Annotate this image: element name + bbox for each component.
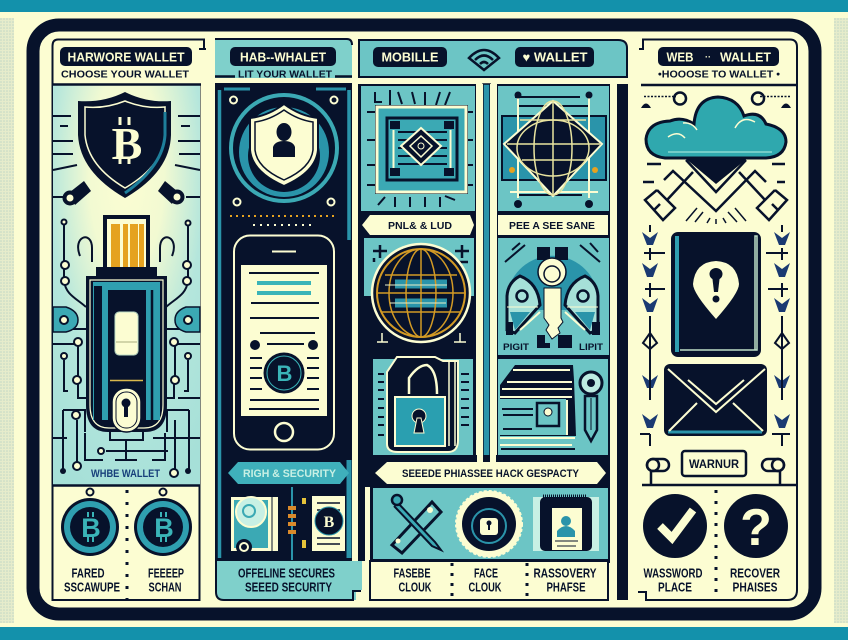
coin captions: SSCAWUPE [64, 580, 120, 594]
icon: USB hardware key [86, 215, 167, 432]
icon: cloud [646, 97, 786, 158]
subtitle [215, 68, 352, 80]
caption box: SEEED SECURITY [245, 580, 333, 594]
connector nodes [644, 92, 790, 104]
heading pill: HAB--WHALET [240, 50, 326, 64]
captions: RECOVER [730, 566, 780, 580]
circuit traces [53, 222, 200, 470]
cell: security tools [370, 487, 610, 563]
ribbon: seed phrase: SEEEDE PHIASSEE HACK GESPACTY [402, 468, 580, 480]
icon: phone [234, 236, 334, 450]
side ornaments right [766, 225, 790, 446]
icon: envelope [664, 364, 767, 436]
captions: WASSWORD [644, 566, 702, 580]
warning label [682, 451, 746, 476]
icon: lock seal [456, 491, 522, 557]
side ornaments left [640, 225, 665, 446]
icon: check circle [643, 494, 707, 558]
coin captions [64, 566, 184, 594]
icon: bitcoin coin right [134, 488, 192, 556]
icon: bitcoin coin left [61, 488, 119, 556]
caption strip: CLOUK [468, 580, 502, 594]
cell: documents and key [498, 359, 608, 455]
corner pads [53, 307, 200, 332]
icon: device with location pin [672, 233, 760, 356]
icon: connector links [62, 181, 184, 206]
pill nodes [647, 459, 784, 484]
caption strip [370, 561, 608, 600]
column backgrounds [483, 84, 490, 456]
icon: bitcoin shield: B [112, 118, 142, 169]
heading pill [230, 47, 336, 66]
cell: key and fish: LIPIT [579, 342, 603, 353]
heading pill: WEB [666, 50, 694, 64]
captions: PHAISES [732, 580, 778, 594]
subtitle: •HOOOSE TO WALLET • [658, 68, 780, 80]
captions [644, 566, 780, 594]
icon: bitcoin coin right: B [154, 513, 174, 543]
icon: crossed tools [392, 495, 441, 553]
icon: question circle: ? [740, 499, 772, 557]
coin captions: SCHAN [148, 580, 182, 594]
captions: PLACE [658, 580, 692, 594]
heading pill: ·· [705, 52, 711, 62]
header bar: MOBILLE [382, 50, 438, 64]
panel: hardware wallet [52, 40, 206, 600]
panel: hot wallet phone [215, 39, 370, 600]
caption strip: CLOUK [398, 580, 432, 594]
caption strip: PHAFSE [546, 580, 586, 594]
cell: padlock [373, 357, 473, 455]
bottom band [0, 627, 848, 640]
subtitle: LIT YOUR WALLET [238, 68, 333, 80]
icon: phone: B [277, 361, 292, 386]
icon: seed cards [231, 487, 345, 560]
panel: web wallet [638, 40, 797, 600]
coin captions: FEEEEP [148, 566, 184, 580]
heading pill: HARWORE WALLET [68, 50, 185, 64]
icon: question circle [724, 494, 788, 558]
icon: profile shield [229, 93, 339, 203]
heading pill: WALLET [720, 50, 771, 64]
caption box: OFFELINE SECURES [238, 566, 335, 580]
label: chip cell: PNL& & LUD [388, 220, 452, 232]
panel: mobile wallet [359, 40, 628, 600]
cell: diamond globe [498, 86, 609, 211]
cell: gold globe [364, 238, 474, 342]
icon: bitcoin shield [78, 92, 171, 198]
icon: wifi [469, 50, 499, 70]
ribbon: security: RIGH & SECURITY [243, 468, 337, 480]
label: wallet: WHBE WALLET [91, 468, 160, 480]
radiating lines [53, 116, 200, 197]
header bar: ♥ WALLET [522, 50, 588, 64]
top band [0, 0, 848, 12]
icon: bitcoin coin left: B [81, 513, 101, 543]
ribbon: seed phrase [375, 462, 606, 484]
icon: chevrons and key pattern [643, 158, 787, 224]
ribbon: security [228, 462, 349, 484]
warning label: WARNUR [689, 457, 739, 471]
icon: seed cards: B [324, 514, 335, 531]
heading pill [60, 47, 192, 66]
heading pill [658, 47, 779, 66]
column frames [358, 84, 370, 561]
icon: ID card [533, 496, 599, 551]
caption box [216, 561, 362, 600]
caption strip: FACE [474, 566, 498, 580]
caption strip: RASSOVERY [534, 566, 597, 580]
coin captions: FARED [72, 566, 104, 580]
label: globe cell [498, 215, 608, 235]
cell: key and fish: PIGIT [503, 342, 529, 353]
cell: key and fish [498, 238, 609, 355]
header bar [359, 40, 627, 77]
label: chip cell [362, 215, 474, 235]
navy band behind ribbon [365, 455, 610, 487]
label: globe cell: PEE A SEE SANE [509, 220, 595, 232]
subtitle: CHOOSE YOUR WALLET [61, 68, 190, 80]
cell: chip [361, 86, 475, 211]
caption strip: FASEBE [394, 566, 430, 580]
